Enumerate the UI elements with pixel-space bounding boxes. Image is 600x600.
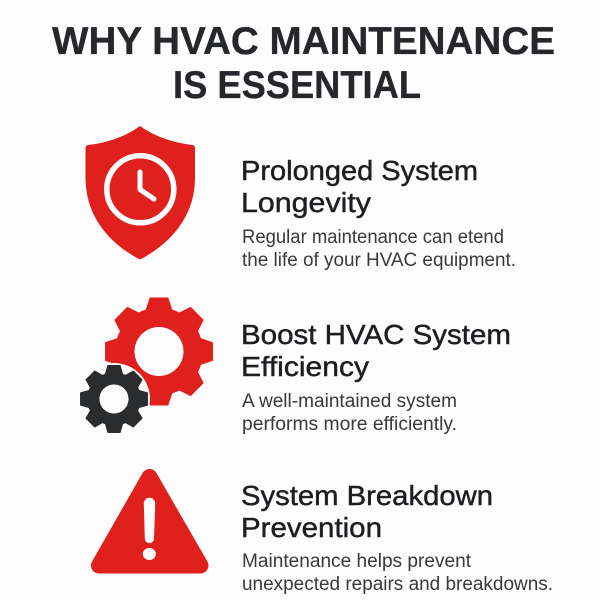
title: [52, 20, 555, 107]
heading: prolonged system longevity: [241, 155, 478, 218]
title: IS ESSENTIAL: [173, 64, 421, 107]
text: efficiency description: [242, 391, 457, 435]
text: longevity description: [242, 227, 516, 271]
heading: system breakdown prevention: [241, 480, 493, 543]
text: prevention description: [242, 551, 553, 595]
heading: system breakdown prevention: Prevention: [241, 512, 382, 543]
panel: system longevity: [86, 126, 516, 271]
panel: breakdown prevention: [99, 477, 553, 595]
heading: boost hvac system efficiency: Boost HVAC System: [241, 319, 511, 350]
icon: shield with clock: [86, 126, 195, 260]
heading: boost hvac system efficiency: Efficiency: [241, 351, 369, 382]
heading: system breakdown prevention: System Breakdown: [241, 480, 493, 511]
text: longevity description: the life of your HVAC equipment.: [242, 250, 516, 271]
icon: gears: [78, 298, 212, 435]
icon: large red gear: [106, 298, 212, 404]
heading: prolonged system longevity: Prolonged System: [241, 155, 478, 186]
text: prevention description: unexpected repairs and breakdowns.: [242, 574, 553, 595]
text: prevention description: Maintenance helps prevent: [242, 551, 472, 572]
heading: prolonged system longevity: Longevity: [241, 187, 371, 218]
icon: warning triangle: [99, 477, 200, 566]
icon: small dark gear: [78, 363, 150, 435]
heading: boost hvac system efficiency: [241, 319, 511, 382]
title: WHY HVAC MAINTENANCE: [52, 20, 555, 63]
panel: system efficiency: [78, 298, 511, 435]
text: efficiency description: performs more efficiently.: [242, 414, 457, 435]
text: longevity description: Regular maintenance can etend: [242, 227, 504, 248]
text: efficiency description: A well-maintained system: [242, 391, 457, 412]
